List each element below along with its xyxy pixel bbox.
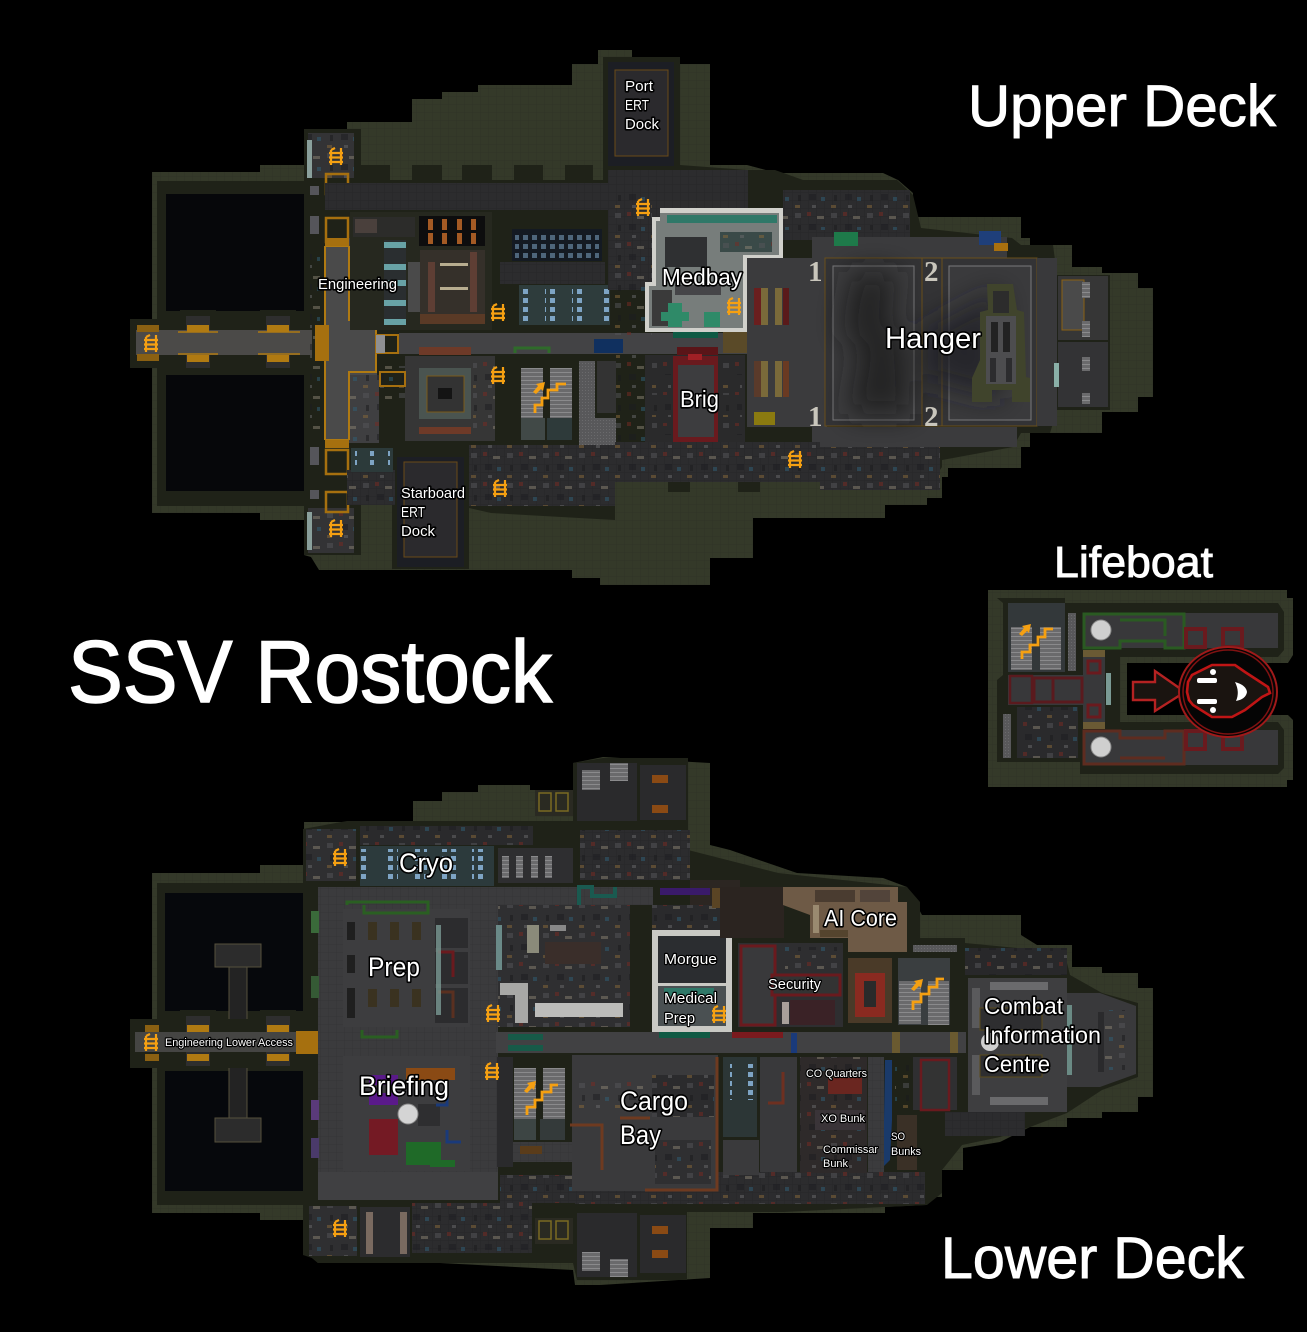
label: Combat Information Centre: Combat bbox=[984, 993, 1064, 1019]
bottom arm bbox=[1083, 730, 1278, 765]
lifeboat structure bbox=[997, 598, 1284, 774]
SO floor bbox=[868, 1057, 884, 1172]
vehicle bay bbox=[379, 347, 495, 441]
towers lower bbox=[306, 829, 357, 1256]
AI core bbox=[783, 887, 907, 952]
server room bbox=[500, 229, 605, 284]
label: Cargo Bay: Bay bbox=[620, 1120, 661, 1150]
blue stripe bbox=[877, 1060, 892, 1170]
lower stairwell left bbox=[513, 1059, 567, 1142]
label: Briefing: Briefing bbox=[359, 1071, 449, 1101]
brig bbox=[645, 347, 745, 442]
label: Prep: Prep bbox=[368, 952, 420, 982]
lifeboat hull bbox=[988, 590, 1293, 787]
main lower floor bbox=[318, 887, 498, 1199]
engineering spine bbox=[315, 238, 398, 448]
main title: SSV Rostock: SSV Rostock bbox=[68, 622, 553, 721]
cargo racks bbox=[754, 288, 789, 425]
top machinery bays bbox=[535, 763, 686, 821]
bottom machinery bays bbox=[535, 1213, 686, 1277]
stair room bbox=[1008, 603, 1065, 672]
label: Commissar Bunk: Bunk bbox=[823, 1158, 848, 1170]
upper stairwell bbox=[517, 356, 573, 444]
number markers: 1 bbox=[808, 401, 822, 433]
label: Combat Information Centre bbox=[984, 993, 1101, 1077]
upper deck map bbox=[130, 50, 1153, 585]
label: Cargo Bay: Cargo bbox=[620, 1086, 688, 1116]
red frame room bbox=[895, 1057, 957, 1110]
label: Combat Information Centre: Information bbox=[984, 1022, 1101, 1048]
number markers: 1 bbox=[808, 256, 822, 288]
briefing room bbox=[343, 1056, 470, 1171]
small side room bbox=[597, 361, 616, 413]
number markers: 2 bbox=[924, 256, 938, 288]
corridor markings bbox=[508, 1032, 958, 1053]
label: Cargo Bay bbox=[620, 1086, 688, 1150]
number markers bbox=[808, 256, 938, 433]
label: Brig: Brig bbox=[680, 386, 719, 412]
label: SO Bunks bbox=[891, 1131, 921, 1158]
lower deck map bbox=[130, 757, 1153, 1285]
engineering lower access corridor bbox=[130, 1010, 320, 1071]
green marking bbox=[515, 348, 549, 353]
rooms above morgue bbox=[652, 887, 784, 938]
medbay bbox=[645, 208, 783, 332]
reactor coils bbox=[419, 216, 485, 324]
central junction bbox=[1083, 650, 1111, 729]
lifeboat markings bbox=[1197, 669, 1247, 713]
label: Port ERT Dock: Dock bbox=[625, 116, 659, 133]
starboard ERT dock bbox=[397, 457, 464, 567]
label: Starboard ERT Dock bbox=[401, 485, 465, 540]
floating walkways bbox=[215, 944, 261, 1142]
CIC lower corridor bbox=[945, 1112, 1025, 1136]
label: Engineering: Engineering bbox=[318, 276, 397, 293]
lower ladders bbox=[144, 849, 726, 1237]
lower cryo bbox=[360, 846, 494, 886]
heading: Upper Deck: Upper Deck bbox=[968, 74, 1277, 139]
lower upper corridor bbox=[498, 887, 653, 905]
upper main corridor bbox=[399, 333, 829, 354]
upper wing frame bbox=[157, 181, 327, 506]
hangar side floor bbox=[747, 258, 827, 427]
prep room bbox=[343, 902, 470, 1037]
upper ship structure bbox=[304, 57, 1110, 569]
upper right corridors bbox=[608, 170, 1017, 490]
number markers: 2 bbox=[924, 401, 938, 433]
conference room bbox=[848, 958, 892, 1023]
label: Commissar Bunk: Commissar bbox=[823, 1144, 878, 1156]
label: Hanger: Hanger bbox=[885, 323, 981, 355]
icon: emblem top bbox=[1091, 620, 1111, 640]
dropship bbox=[972, 284, 1030, 402]
aft rooms bbox=[1054, 276, 1108, 407]
blue marking bbox=[594, 339, 623, 353]
top towers and rooms bbox=[307, 133, 354, 553]
bottom rooms bbox=[360, 1203, 532, 1257]
lower wing void top bbox=[165, 893, 303, 1011]
upper cryo room bbox=[519, 285, 610, 325]
lower corridor rooms bbox=[318, 1057, 925, 1204]
label: Medical Prep bbox=[664, 990, 717, 1027]
asphalt block bbox=[579, 361, 616, 471]
label: Cryo: Cryo bbox=[399, 848, 453, 878]
icon: emblem bottom bbox=[1091, 737, 1111, 757]
label: Security: Security bbox=[768, 976, 821, 993]
heading: Lower Deck: Lower Deck bbox=[941, 1226, 1245, 1291]
top arm bbox=[1083, 613, 1278, 648]
label: Morgue: Morgue bbox=[664, 951, 717, 968]
icon: CIC emblem bbox=[981, 1033, 999, 1051]
asphalt strips bbox=[1003, 613, 1076, 758]
morgue and medical prep bbox=[652, 930, 732, 1032]
lifeboat map bbox=[988, 590, 1293, 787]
lifeboat silhouette bbox=[1187, 665, 1270, 717]
label: SO Bunks: Bunks bbox=[891, 1146, 921, 1158]
upper wing void top bbox=[166, 194, 311, 311]
hangar bay bbox=[808, 256, 1057, 433]
side cargo cold rooms bbox=[723, 1057, 797, 1175]
upper hull plating bbox=[152, 50, 1153, 585]
label: Starboard ERT Dock: Starboard bbox=[401, 485, 465, 502]
label: Medical Prep: Medical bbox=[664, 990, 717, 1007]
label: Starboard ERT Dock: ERT bbox=[401, 504, 425, 521]
label: Combat Information Centre: Centre bbox=[984, 1051, 1050, 1077]
lower wing frame bbox=[157, 883, 327, 1205]
engineering wing corridor bbox=[130, 310, 320, 375]
upper wing void bottom bbox=[166, 375, 311, 491]
upper ladders bbox=[144, 148, 802, 537]
label: Commissar Bunk bbox=[823, 1144, 878, 1170]
SO bunks bbox=[897, 1115, 917, 1170]
label: Port ERT Dock: ERT bbox=[625, 97, 649, 114]
officer quarters bbox=[800, 1057, 867, 1173]
lower hull plating bbox=[152, 757, 1153, 1285]
teal markings bbox=[579, 887, 615, 905]
medbay doors bbox=[673, 332, 747, 353]
top corridor bbox=[325, 183, 610, 210]
upper lower rooms bbox=[347, 445, 615, 506]
heading: Lifeboat: Lifeboat bbox=[1054, 538, 1213, 587]
label: XO Bunk: XO Bunk bbox=[821, 1113, 865, 1125]
label: Port ERT Dock bbox=[625, 78, 659, 133]
lower ship structure bbox=[303, 758, 1138, 1280]
port ERT dock bbox=[608, 62, 674, 166]
label: CO Quarters: CO Quarters bbox=[806, 1068, 867, 1080]
label: SO Bunks: SO bbox=[891, 1131, 905, 1143]
security bbox=[738, 943, 843, 1027]
icon: briefing emblem bbox=[398, 1104, 418, 1124]
label: Starboard ERT Dock: Dock bbox=[401, 523, 435, 540]
mess and galley bbox=[496, 905, 630, 1027]
lower top rooms bbox=[360, 826, 740, 910]
combat information centre bbox=[965, 948, 1067, 1112]
lower wing void bottom bbox=[165, 1071, 303, 1191]
cargo bay bbox=[570, 1055, 718, 1191]
lifeboat emblem ellipse bbox=[1179, 647, 1277, 737]
label: Engineering Lower Access: Engineering Lower Access bbox=[165, 1037, 293, 1049]
asphalt vent bbox=[913, 945, 957, 952]
label: Medical Prep: Prep bbox=[664, 1010, 695, 1027]
label: Medbay: Medbay bbox=[662, 264, 742, 290]
lower main corridor bbox=[496, 1032, 966, 1053]
label: Port ERT Dock: Port bbox=[625, 78, 654, 95]
arrow to lifeboat bbox=[1133, 671, 1185, 711]
CIC forward bridge bbox=[1067, 993, 1136, 1087]
lower stairwell right bbox=[898, 958, 950, 1025]
left wing rooms bbox=[1008, 675, 1083, 758]
label: AI Core: AI Core bbox=[824, 905, 897, 931]
engine rooms bbox=[350, 212, 492, 330]
